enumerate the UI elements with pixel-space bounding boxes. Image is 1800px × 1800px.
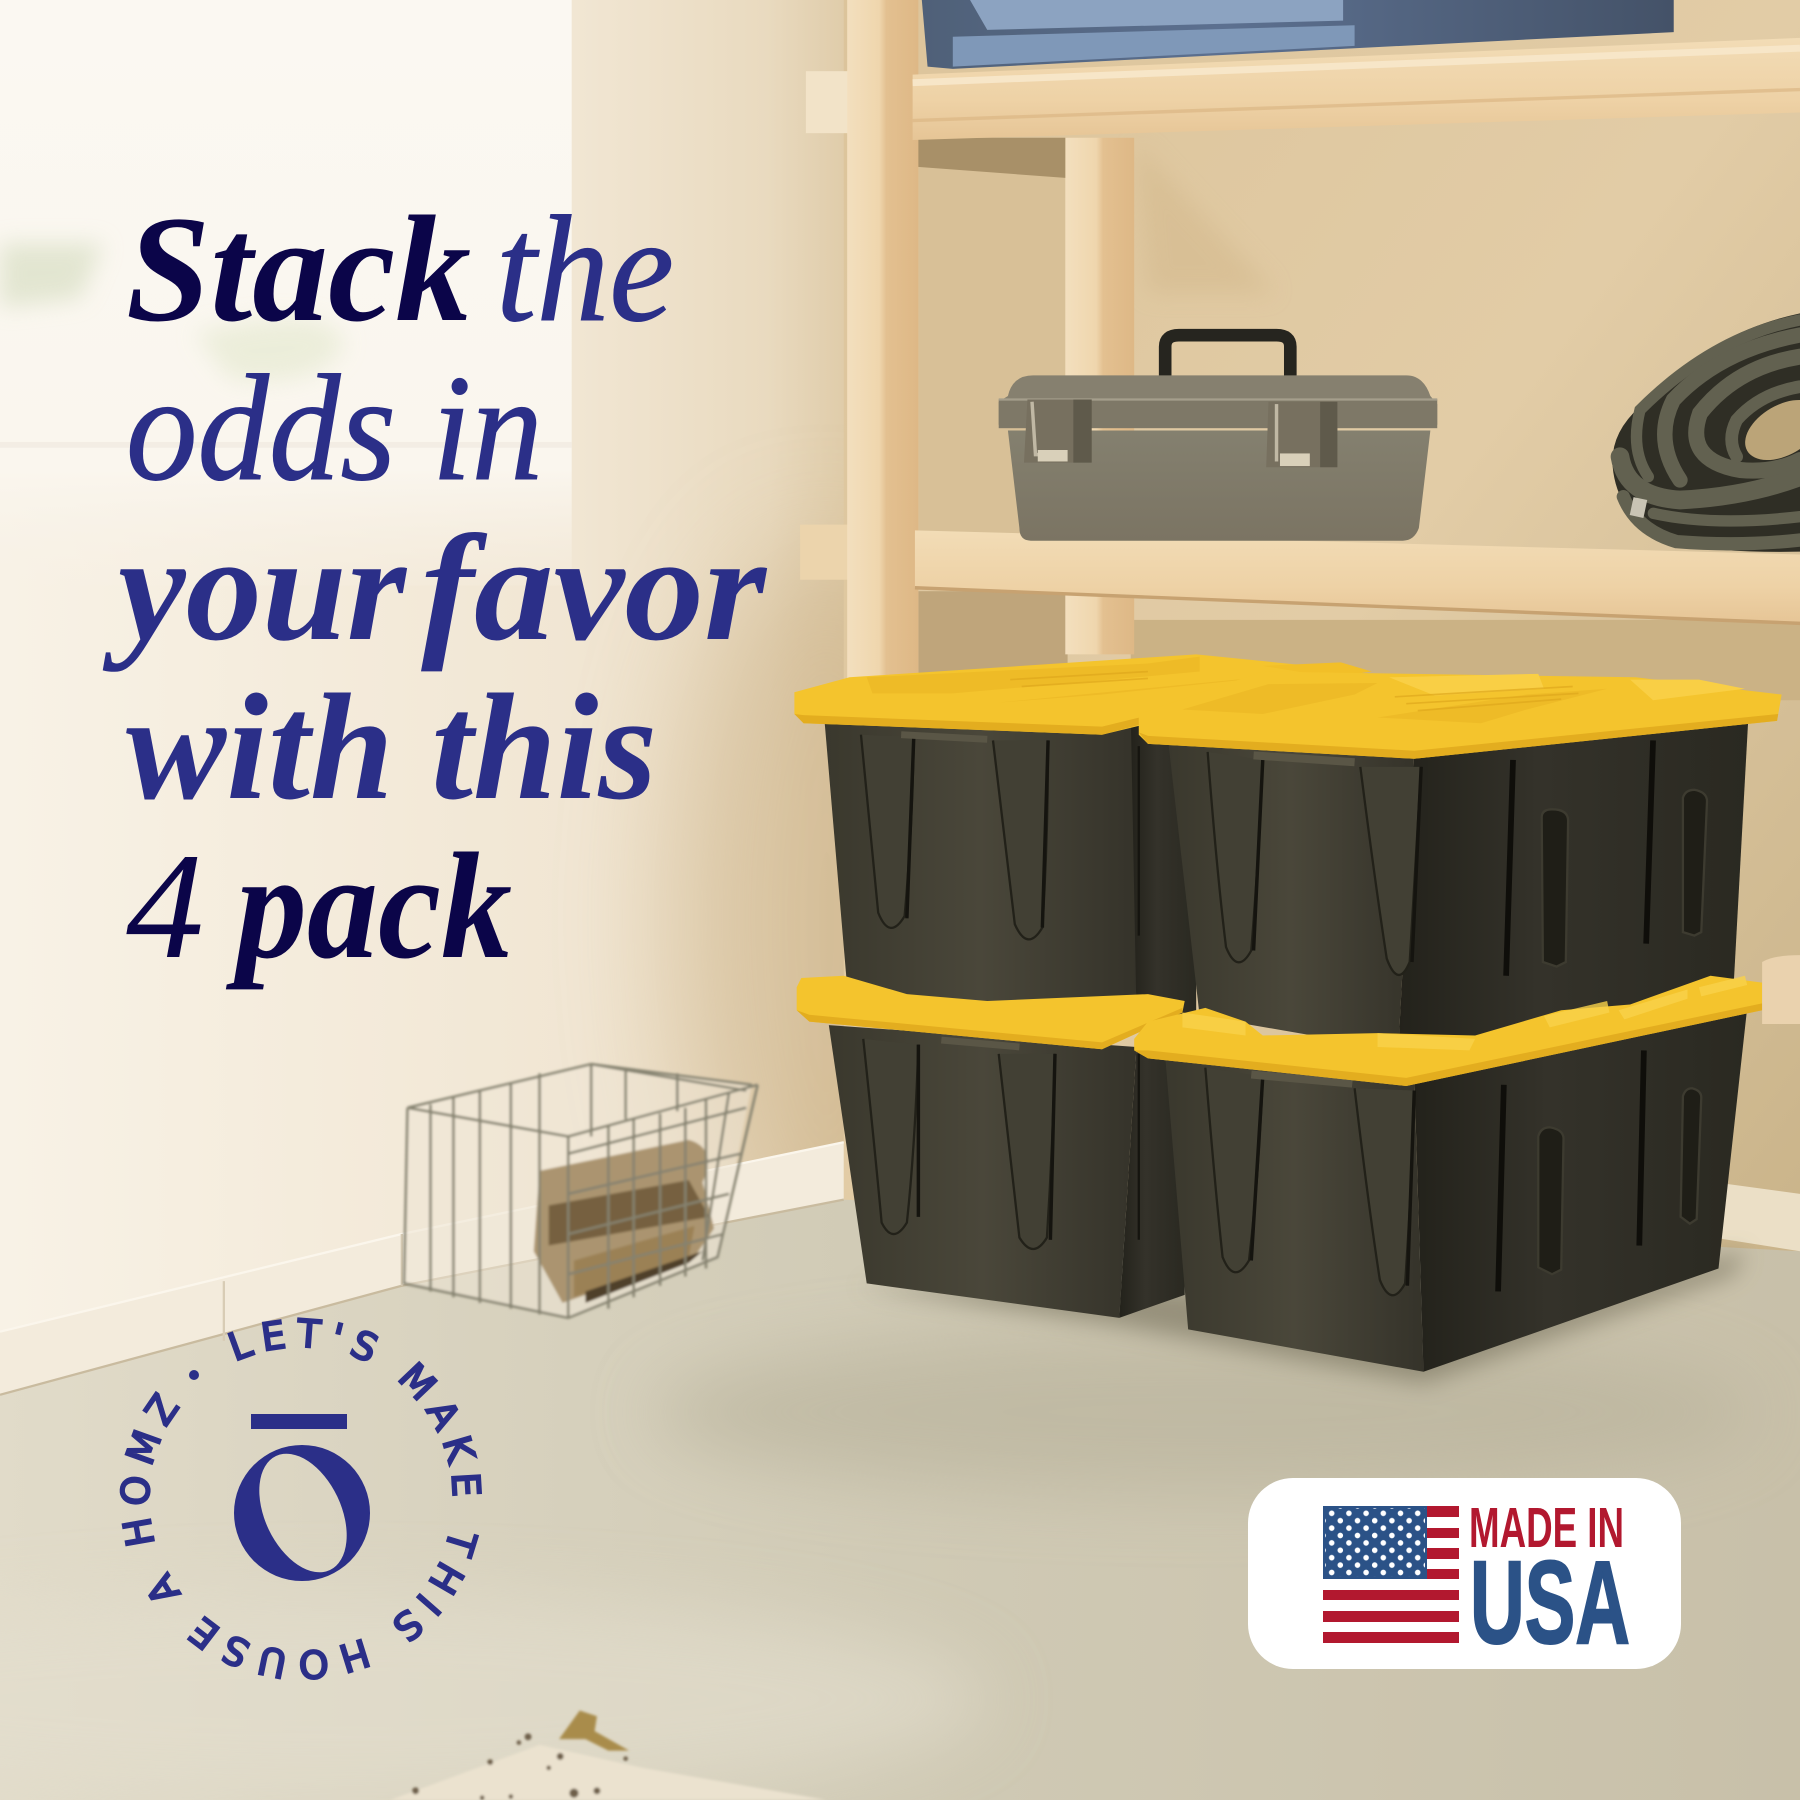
bin: upper right bbox=[1139, 672, 1782, 1050]
grey toolbox bbox=[999, 335, 1437, 541]
upper shelf bbox=[913, 38, 1800, 140]
front post bbox=[847, 0, 918, 680]
wire basket bbox=[404, 1064, 758, 1318]
bin: lower right bbox=[1134, 976, 1762, 1372]
american flag bbox=[1323, 1506, 1459, 1643]
rolled towels bbox=[534, 1140, 714, 1303]
line: with this: with this bbox=[126, 663, 657, 831]
bin: upper left bbox=[794, 654, 1372, 1016]
badge background bbox=[1248, 1478, 1681, 1669]
usa: USA bbox=[1470, 1537, 1630, 1669]
word: the: the bbox=[496, 185, 674, 353]
circular slogan: LET'S MAKE THIS HOUSE A HOMZ bbox=[120, 1317, 482, 1680]
word: your: your bbox=[102, 504, 408, 672]
floor bbox=[0, 1200, 1800, 1800]
rear post bbox=[1065, 138, 1134, 654]
latches bbox=[1024, 399, 1091, 463]
headline bbox=[102, 185, 768, 990]
slogan dot bbox=[189, 1370, 199, 1380]
word: favor: favor bbox=[421, 504, 768, 672]
floor shadow under bins bbox=[855, 1251, 1745, 1383]
folded blue towels bbox=[922, 0, 1674, 69]
logo mark bbox=[234, 1414, 370, 1581]
shelf stubs bbox=[806, 71, 849, 133]
bin: lower left bbox=[797, 976, 1185, 1318]
handle bbox=[1165, 335, 1290, 377]
coiled hose bbox=[1612, 313, 1800, 552]
lower shelf bbox=[915, 530, 1800, 623]
lid bbox=[999, 375, 1437, 425]
basket contents bbox=[404, 1064, 752, 1318]
word: Stack: Stack bbox=[126, 185, 471, 353]
circular logo bbox=[120, 1317, 482, 1680]
bright window bbox=[0, 0, 572, 585]
line: odds in: odds in bbox=[126, 344, 543, 512]
rear wall shadow between posts bbox=[918, 179, 1065, 533]
body bbox=[1008, 430, 1430, 541]
back wall bbox=[844, 0, 1800, 1286]
shelving unit bbox=[800, 0, 1800, 680]
left wall bbox=[0, 0, 844, 1330]
rough patch on floor bbox=[390, 1710, 827, 1800]
made in: MADE IN bbox=[1469, 1496, 1624, 1560]
wood block at right edge bbox=[1762, 955, 1800, 1024]
baseboards bbox=[0, 1142, 1800, 1395]
numeral: 4: 4 bbox=[126, 822, 204, 990]
warm wall shading bbox=[634, 537, 844, 1164]
made in usa badge bbox=[1248, 1478, 1681, 1669]
word: pack: pack bbox=[226, 822, 512, 990]
